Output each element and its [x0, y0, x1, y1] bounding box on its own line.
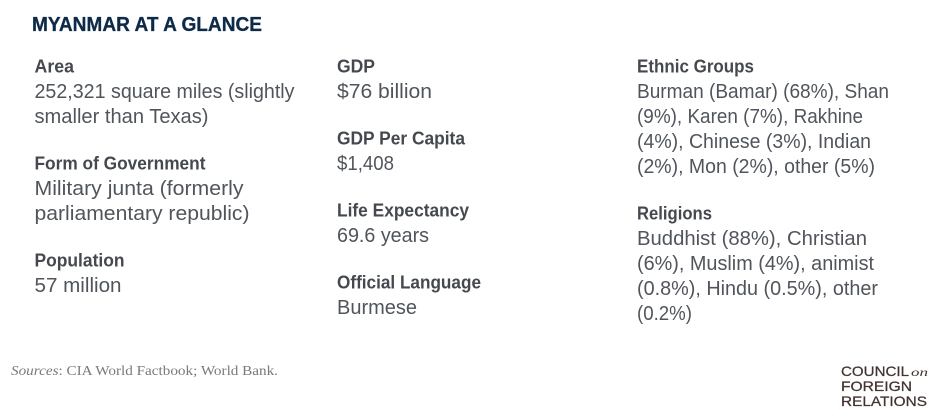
- fact: form of government: [34, 154, 250, 225]
- fact: GDP: GDP: [337, 56, 375, 76]
- fact: religions: Buddhist (88%), Christian: [637, 228, 867, 250]
- fact: area: [34, 56, 294, 128]
- fact: religions: [637, 204, 878, 325]
- fact: religions: Religions: [637, 204, 712, 224]
- fact: form of government: parliamentary republic): [34, 203, 250, 225]
- logo: Council on Foreign Relations: RELATIONS: [841, 393, 927, 409]
- fact: area: smaller than Texas): [34, 106, 209, 128]
- fact: ethnic groups: [637, 56, 889, 178]
- fact: ethnic groups: Ethnic Groups: [637, 56, 754, 76]
- column 3: demographics: [637, 56, 889, 325]
- fact: population: [34, 250, 124, 297]
- fact: population: Population: [34, 250, 124, 270]
- fact: GDP: [337, 56, 432, 103]
- fact: religions: (0.2%): [637, 303, 692, 325]
- title: MYANMAR AT A GLANCE: [32, 14, 262, 36]
- fact: form of government: Form of Government: [34, 154, 206, 174]
- fact: ethnic groups: (4%), Chinese (3%), Indian: [637, 131, 871, 153]
- fact: form of government: Military junta (formerly: [34, 178, 244, 200]
- logo: Council on Foreign Relations: FOREIGN: [841, 378, 912, 394]
- fact: official language: Official Language: [337, 272, 481, 292]
- fact: area: Area: [34, 56, 75, 76]
- fact: ethnic groups: Burman (Bamar) (68%), Shan: [637, 81, 889, 103]
- column 2: economy and society: [337, 56, 481, 319]
- fact: religions: (6%), Muslim (4%), animist: [637, 253, 874, 275]
- fact: GDP per capita: $1,408: [337, 153, 394, 175]
- fact: life expectancy: Life Expectancy: [337, 200, 469, 220]
- fact: GDP per capita: [337, 128, 466, 175]
- fact: religions: (0.8%), Hindu (0.5%), other: [637, 278, 878, 300]
- fact: GDP: $76 billion: [337, 81, 432, 103]
- column 1: basic facts: [34, 56, 294, 297]
- fact: ethnic groups: (9%), Karen (7%), Rakhine: [637, 106, 863, 128]
- fact: area: 252,321 square miles (slightly: [34, 81, 294, 103]
- fact: ethnic groups: (2%), Mon (2%), other (5%): [637, 156, 875, 178]
- logo: Council on Foreign Relations: [841, 363, 928, 409]
- logo: Council on Foreign Relations: on: [911, 365, 928, 379]
- sources note: Sources : CIA World Factbook; World Bank.: [11, 364, 278, 379]
- fact: population: 57 million: [34, 275, 122, 297]
- fact: life expectancy: 69.6 years: [337, 225, 429, 247]
- fact: life expectancy: [337, 200, 469, 247]
- fact: official language: Burmese: [337, 297, 417, 319]
- fact: GDP per capita: GDP Per Capita: [337, 128, 466, 148]
- fact: official language: [337, 272, 481, 319]
- logo: Council on Foreign Relations: COUNCIL: [841, 363, 909, 379]
